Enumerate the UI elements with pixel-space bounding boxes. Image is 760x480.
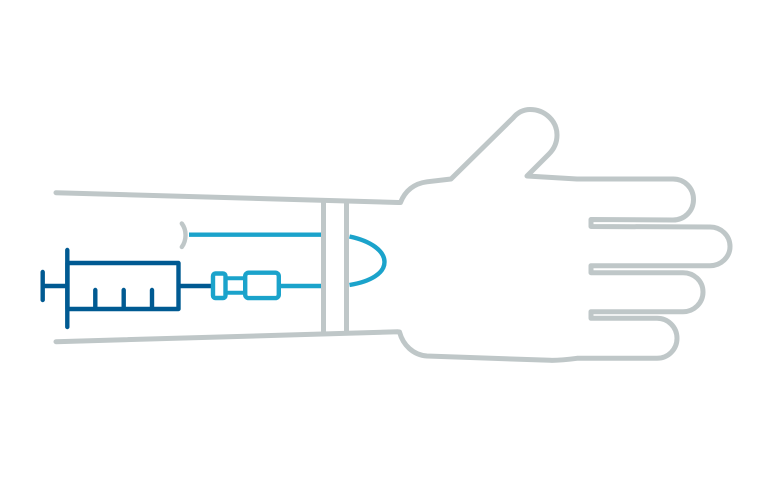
barrel ticks — [95, 290, 152, 308]
large connector block — [245, 273, 279, 298]
syringe barrel — [68, 263, 178, 309]
connector bridge — [226, 278, 245, 293]
grey insertion mark — [182, 224, 186, 247]
blue vessel loop — [350, 236, 384, 285]
lower blue tube — [280, 284, 321, 288]
plunger — [43, 272, 67, 300]
needle line — [179, 284, 212, 288]
syringe — [43, 250, 212, 327]
syringe flange — [65, 250, 70, 327]
wrist band — [324, 200, 346, 334]
upper blue tube — [189, 232, 321, 237]
blue connector — [213, 273, 321, 298]
small connector block — [213, 274, 226, 298]
arm and hand outline — [56, 110, 730, 360]
